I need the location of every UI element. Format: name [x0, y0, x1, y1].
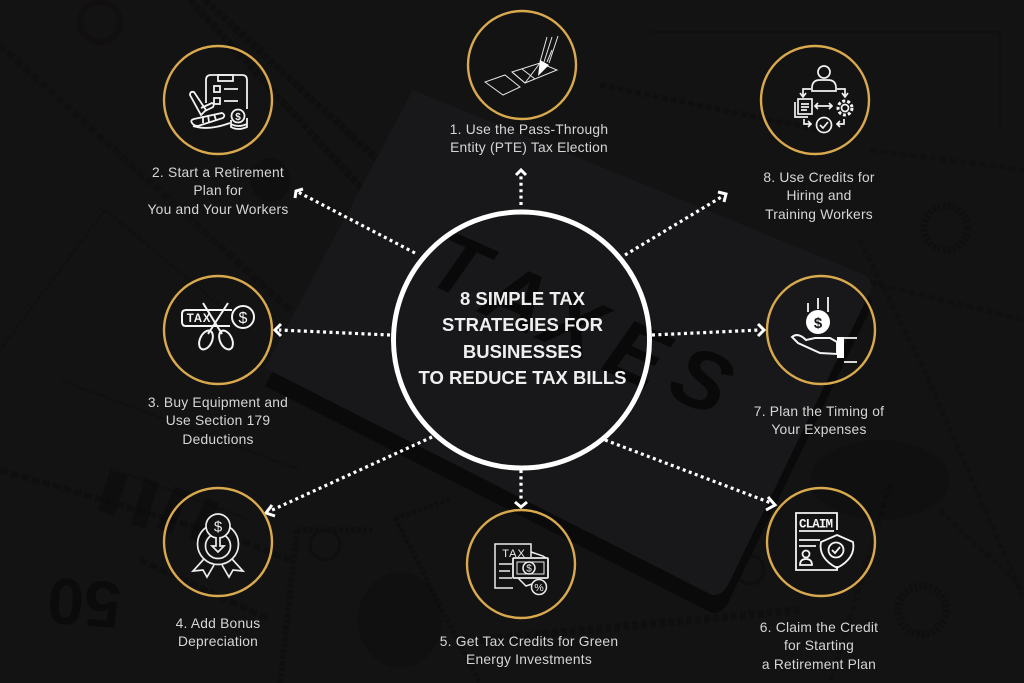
title	[418, 288, 626, 388]
label 3: Deductions	[182, 432, 254, 447]
item 8 icon: person, document, gear workflow	[761, 46, 869, 154]
background: dollar bills and tax box: S	[657, 325, 747, 434]
label 2: You and Your Workers	[148, 202, 288, 217]
background: dollar bills and tax box: X	[525, 268, 623, 380]
label 3: Use Section 179	[166, 413, 270, 428]
label 4: 4. Add Bonus	[176, 616, 260, 630]
label 5	[440, 634, 618, 667]
label 1: Entity (PTE) Tax Election	[450, 140, 608, 155]
title: TO REDUCE TAX BILLS	[419, 367, 626, 388]
item 5 icon: tax sheet with cash and percent: TAX	[502, 548, 526, 560]
label 4: Depreciation	[178, 634, 258, 649]
label 5: 5. Get Tax Credits for Green	[440, 634, 618, 648]
label 5: Energy Investments	[466, 652, 592, 667]
label 1	[450, 122, 608, 155]
item 3 icon: scissors cutting tax: $	[239, 310, 248, 327]
label 6: for Starting	[784, 638, 854, 653]
label 6: 6. Claim the Credit	[760, 620, 878, 634]
label 8	[763, 170, 875, 222]
item 1 icon: pen marking ballot	[468, 11, 576, 119]
label 2: Plan for	[193, 183, 243, 198]
item 4 icon: dollar medal with down arrow	[164, 488, 272, 596]
item 2 icon: rocking chair and clipboard: $	[235, 112, 241, 123]
title: BUSINESSES	[463, 341, 582, 362]
item 7 icon: hand with falling coin	[767, 276, 875, 384]
item 5 icon: tax sheet with cash and percent	[467, 510, 575, 618]
item 7 icon: hand with falling coin: $	[814, 315, 823, 332]
background: dollar bills and tax box: T	[416, 212, 507, 322]
title: STRATEGIES FOR	[442, 314, 603, 335]
label 2	[148, 164, 288, 217]
item 3 icon: scissors cutting tax	[164, 276, 272, 384]
label 7	[754, 404, 884, 437]
item 6 icon: claim form with shield: CLAIM	[799, 518, 833, 532]
item 4 icon: dollar medal with down arrow: $	[214, 518, 223, 536]
item 6 icon: claim form with shield	[767, 488, 875, 596]
background: dollar bills and tax box: 50	[45, 564, 123, 642]
label 8: Hiring and	[786, 188, 852, 203]
label 6: a Retirement Plan	[762, 657, 876, 672]
label 3	[148, 394, 288, 447]
item 5 icon: tax sheet with cash and percent: %	[534, 582, 544, 594]
label 4	[176, 616, 260, 649]
background: dollar bills and tax box: A	[468, 241, 564, 353]
label 1: 1. Use the Pass-Through	[450, 122, 608, 136]
item 2 icon: rocking chair and clipboard	[164, 46, 272, 154]
label 7: Your Expenses	[771, 422, 867, 437]
label 2: 2. Start a Retirement	[152, 164, 284, 180]
label 3: 3. Buy Equipment and	[148, 394, 288, 410]
label 8: Training Workers	[765, 207, 873, 222]
title: 8 SIMPLE TAX	[460, 288, 585, 309]
label 6	[760, 620, 878, 672]
label 8: 8. Use Credits for	[763, 170, 875, 184]
background: dollar bills and tax box: E	[592, 299, 684, 409]
label 7: 7. Plan the Timing of	[754, 404, 884, 418]
item 5 icon: tax sheet with cash and percent: $	[526, 564, 532, 574]
item 3 icon: scissors cutting tax: TAX	[187, 313, 211, 325]
